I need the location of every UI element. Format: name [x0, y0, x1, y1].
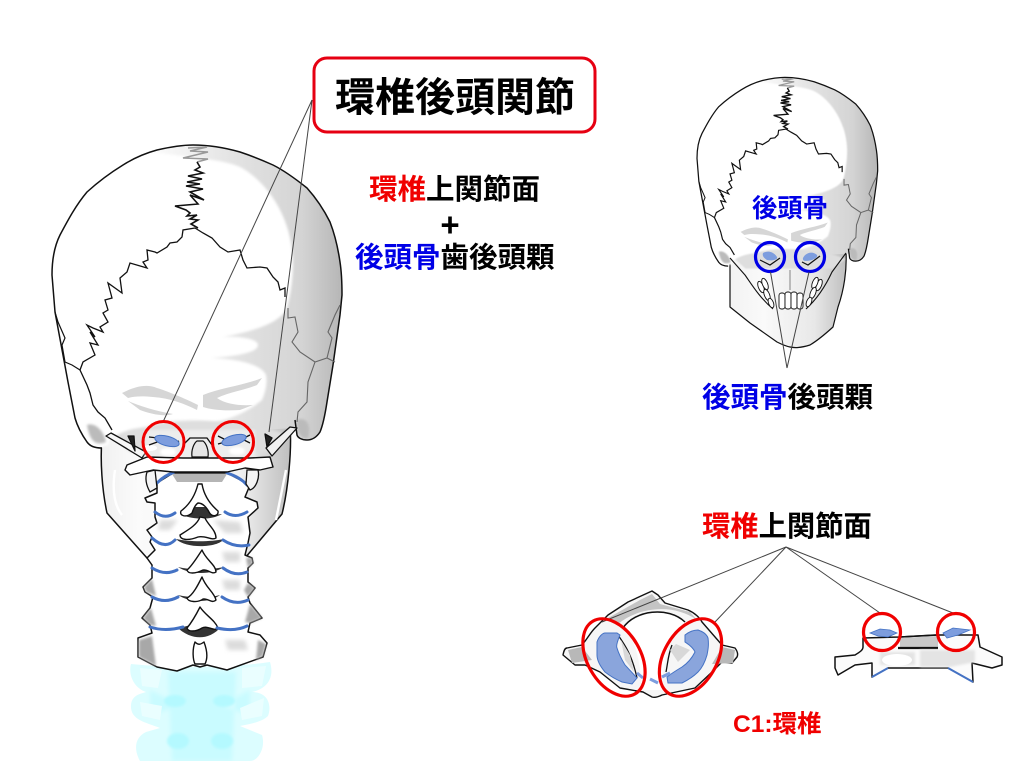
red circle: right joint: [212, 422, 254, 462]
cranium: [44, 145, 342, 458]
red circle: left joint: [143, 422, 184, 462]
zygomatic strips and skull base: [106, 427, 297, 460]
body shading: [880, 650, 975, 667]
atlas outline: [563, 591, 738, 697]
atlas C1 transverse arch: [125, 457, 273, 475]
vertebra body soft shading: [158, 520, 248, 650]
title box: [314, 58, 595, 132]
right articular facet: [667, 630, 708, 683]
left articular facet: [597, 633, 637, 684]
panel: C1 atlas anterior view: [835, 628, 1002, 682]
blue circles: occipital condyles: [756, 242, 824, 272]
black interlaminar gaps: [176, 507, 224, 637]
grey shading on tips: [568, 647, 735, 664]
cervical vertebrae: [138, 473, 267, 671]
cranium outline: [52, 145, 342, 448]
skull base shading: [113, 421, 290, 452]
panel: small skull with occipital condyles: [692, 77, 878, 348]
leader lines: articular facets: [602, 547, 953, 622]
title box: 環椎後頭関節: [335, 76, 575, 120]
small occipital condyles: [760, 252, 820, 265]
left facet: [870, 629, 897, 637]
sagittal suture: [183, 147, 208, 162]
vertebral canal: [623, 613, 685, 690]
text: definition of the joint: 環椎上関節面: [369, 174, 540, 206]
lambdoid suture right: [195, 228, 285, 297]
grey band under atlas: [172, 474, 227, 482]
lateral mass hooks: [146, 470, 259, 492]
panel: C1 atlas superior view: [563, 591, 738, 697]
text: definition of the joint: 後頭骨歯後頭顆: [355, 242, 555, 274]
ear shading: [87, 419, 309, 443]
anterior arch facet: [637, 673, 670, 683]
text: definition of the joint: +: [440, 206, 460, 243]
leader lines: title to joints: [163, 100, 312, 432]
left occipital condyle: [143, 433, 180, 456]
posterior arch shading: [608, 594, 697, 624]
label: occipital condyle: 後頭骨後頭顆: [702, 382, 874, 414]
inner facet edges: [618, 635, 672, 678]
label: C1 atlas: C1:環椎: [733, 710, 821, 738]
spinous processes: [180, 484, 218, 664]
small mandible: [730, 252, 846, 348]
red circles: anterior view facets: [864, 614, 974, 650]
odontoid process: [192, 441, 208, 457]
leader lines: occipital condyles: [770, 272, 809, 368]
red ellipses: superior view facets: [570, 608, 734, 707]
small teeth and face: [730, 253, 846, 309]
mandible highlight: [114, 470, 286, 520]
mandible behind the spine: [101, 426, 291, 558]
right occipital condyle: [218, 432, 250, 455]
intervertebral blue joint lines: [150, 473, 249, 630]
label: occipital bone: 後頭骨: [752, 195, 828, 223]
small cranium: [692, 77, 878, 272]
vertebra process tip shading: [139, 558, 266, 666]
panel: large posterior skull and cervical spine: [44, 145, 342, 761]
lambdoid suture left: [80, 228, 195, 430]
faded lower cervical spine: [130, 662, 271, 761]
anterior arch band: [900, 636, 938, 647]
label: superior articular facet of atlas: 環椎上関節面: [702, 510, 872, 542]
cranium white area: [44, 152, 293, 458]
lower blue edges: [872, 668, 973, 682]
nuchal ridges: [122, 378, 262, 415]
right facet: [943, 628, 970, 638]
text: definition of the joint: [355, 174, 555, 274]
